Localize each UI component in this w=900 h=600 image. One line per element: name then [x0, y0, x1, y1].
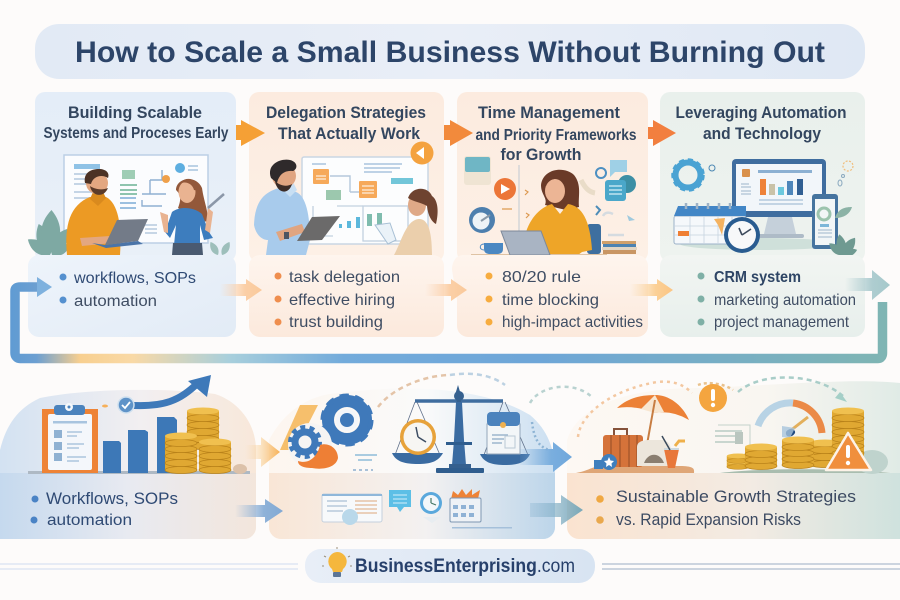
illustration: balance scale with clock and document: [378, 374, 593, 473]
arrow: balance to sustainable, blue: [520, 442, 572, 472]
panel: time management: [457, 92, 648, 262]
card: step 3 bullets: [452, 255, 648, 337]
icon: warning coin: [699, 384, 727, 412]
arrow: balance to sustainable, teal: [530, 495, 583, 525]
icon: light bulb: [322, 547, 352, 577]
orange arrow: step 2 to 3: [444, 120, 473, 146]
panel: building scalable systems: [24, 92, 236, 262]
heading: time management: and Priority Frameworks: [476, 127, 636, 144]
arrow: card 1 to 2: [220, 279, 262, 301]
card: step 2 bullets: [249, 255, 444, 337]
card: step 3 bullets: time blocking: [502, 292, 599, 309]
footer brand: [0, 547, 900, 583]
card: step 2 bullets: task delegation: [289, 269, 400, 286]
orange arrow: step 3 to 4: [648, 120, 676, 146]
card: step 2 bullets: effective hiring: [289, 292, 395, 309]
feedback loop arrow: [15, 277, 882, 358]
arrow: growth to balance, orange: [245, 437, 280, 467]
illustration: planning tools row: [322, 489, 512, 528]
card: step 3 bullets: 80/20 rule: [502, 269, 581, 286]
arrow: growth to balance, blue: [235, 499, 283, 523]
woman in beige: [394, 219, 432, 255]
panel: delegation strategies: [249, 92, 444, 262]
card: step 1 bullets: [28, 255, 236, 337]
card: step 1 bullets: automation: [74, 293, 157, 310]
arrow: card 3 to 4: [630, 279, 673, 301]
bullets: workflows: automation: [47, 512, 132, 529]
card: step 4 bullets: marketing automation: [714, 292, 856, 309]
heading: leveraging automation: Leveraging Automation: [676, 104, 846, 122]
orange arrow: step 1 to 2: [236, 120, 265, 146]
card: step 4 bullets: project management: [714, 314, 850, 331]
man in blue shirt: [254, 188, 310, 255]
bullets: workflows: Workflows, SOPs: [46, 489, 178, 508]
illustration: umbrella and suitcase: [576, 377, 847, 473]
card: step 4 bullets: CRM system: [714, 269, 801, 286]
plant: [24, 210, 73, 260]
illustration: monitor, calendar, clock, phone: [673, 159, 859, 258]
illustration: team at whiteboard with laptop: [24, 155, 232, 260]
panel: balance and tools: [269, 374, 593, 539]
illustration: speed gauge: [715, 403, 822, 445]
bullets: sustainable growth: vs. Rapid Expansion Risks: [616, 510, 801, 529]
heading: building scalable systems: Systems and Proceses Early: [44, 125, 229, 142]
illustration: gears: [280, 396, 377, 470]
bullets: sustainable growth: Sustainable Growth Strategies: [616, 487, 856, 506]
hair and woman: [541, 170, 579, 210]
icon: warning triangle: [826, 433, 871, 470]
heading: building scalable systems: Building Scalable: [68, 104, 202, 122]
card: step 2 bullets: trust building: [289, 314, 383, 331]
arrow: card 2 to 3: [425, 279, 467, 301]
heading: delegation strategies: Delegation Strategies: [266, 104, 426, 122]
woman: [176, 179, 208, 222]
panel: workflows and growth: [0, 375, 256, 539]
title banner: How to Scale a Small Business Without Burning Out: [75, 36, 825, 69]
card: step 3 bullets: high-impact activities: [502, 314, 643, 331]
illustration: manager delegating to employee: [254, 142, 438, 255]
illustration: coin stacks: [720, 408, 890, 474]
illustration: checklist, bar chart and coins: [28, 375, 250, 474]
panel: sustainable growth vs risks: [567, 377, 900, 539]
panel: automation and technology: [660, 92, 865, 262]
badge: [410, 142, 434, 164]
card: step 1 bullets: workflows, SOPs: [73, 270, 196, 287]
title banner: [35, 24, 865, 79]
brand name: BusinessEnterprising.com: [355, 556, 575, 577]
heading: time management: for Growth: [500, 146, 582, 164]
chair: [587, 224, 601, 254]
heading: time management: Time Management: [478, 104, 620, 122]
arrow: card 4 onward: [845, 270, 890, 300]
card: step 4 bullets: [660, 255, 865, 337]
heading: delegation strategies: That Actually Work: [278, 125, 421, 143]
bullets: sustainable growth: [596, 487, 856, 529]
bullets: workflows: [30, 489, 178, 529]
man: [66, 197, 120, 255]
illustration: woman working at laptop with task icons: [464, 156, 637, 258]
heading: leveraging automation: and Technology: [703, 125, 822, 143]
